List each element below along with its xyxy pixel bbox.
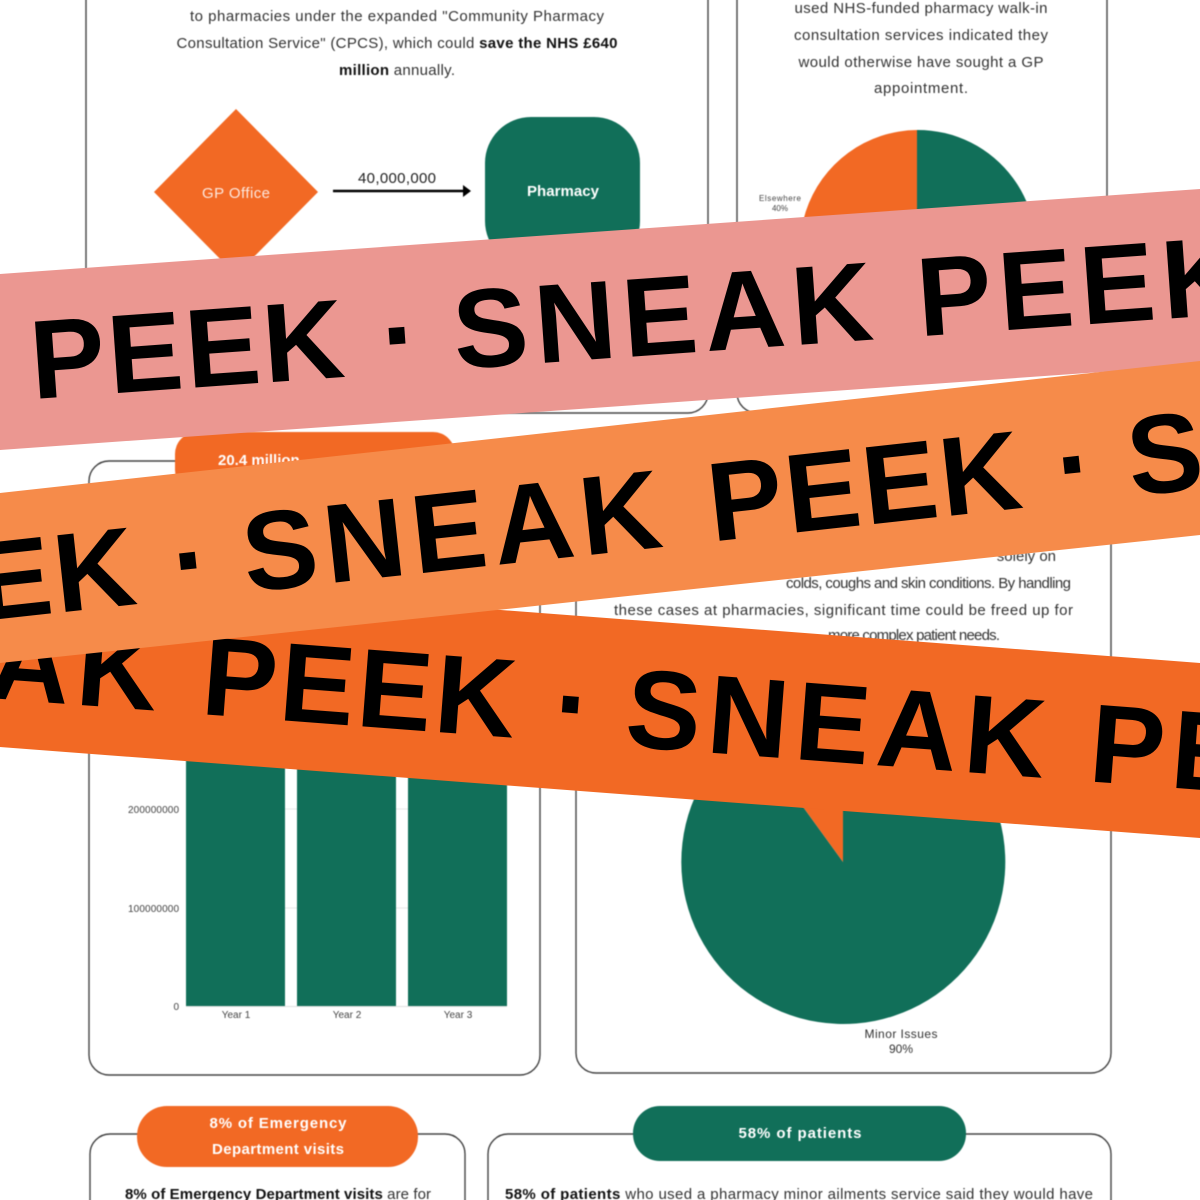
flow: GP office node — [154, 109, 318, 275]
text block: GP time: these cases at pharmacies, significant time could be freed up for — [614, 602, 1073, 619]
pie chart: elsewhere 40%: Elsewhere — [759, 194, 802, 203]
banner: light orange sneak peek: SNEAK — [236, 446, 674, 616]
badge: 20.4 million — [175, 432, 455, 492]
text block: walk-in services: appointment. — [874, 80, 968, 97]
flow: pharmacy node: Pharmacy — [527, 183, 600, 200]
badge: 8% of Emergency Department visits — [137, 1106, 418, 1167]
badge: 58% of patients: 58% of patients — [738, 1125, 862, 1142]
text block: walk-in services — [794, 0, 1048, 97]
text block: CPCS savings: to pharmacies under the expanded "Community Pharmacy — [190, 8, 604, 25]
panel: minor issues card — [576, 461, 1111, 1073]
flow arrow: 40,000,000 — [333, 170, 471, 197]
text block: CPCS savings — [176, 8, 618, 79]
panel: walk-in consultation services — [737, 0, 1107, 413]
badge: 8% of Emergency Department visits: Department visits — [212, 1141, 344, 1158]
banner: light orange sneak peek: PEEK — [701, 407, 1030, 565]
banner: dark orange sneak peek — [0, 572, 1200, 838]
bar chart: three years: 0 — [173, 1002, 179, 1013]
text block: walk-in services: used NHS-funded pharmacy walk-in — [794, 0, 1048, 17]
text block: GP time: more complex patient needs. — [828, 627, 1000, 644]
text block: GP time: solely on — [997, 548, 1056, 565]
badge: 20.4 million: 20.4 million — [218, 452, 300, 469]
banner: pink sneak peek: PEEK — [26, 276, 351, 423]
pie chart: minor issues 90%: 90% — [889, 1042, 913, 1056]
panel: 58% of patients — [488, 1106, 1111, 1200]
pie chart: minor issues 90%: Minor Issues — [864, 1027, 938, 1041]
flow: GP office node: GP Office — [202, 185, 270, 202]
text block: CPCS savings: Consultation Service" (CPCS), which could save the NHS £640 — [176, 35, 618, 52]
badge: 8% of Emergency Department visits: 8% of Emergency — [210, 1115, 347, 1132]
bar chart: three years: 200000000 — [128, 805, 179, 816]
text block: GP time: colds, coughs and skin conditions. By handling — [786, 575, 1071, 592]
badge: 58% of patients — [633, 1106, 966, 1161]
bar chart: three years — [128, 720, 507, 1021]
text block: CPCS savings: million annually. — [339, 62, 455, 79]
banner: light orange sneak peek: · — [165, 495, 223, 624]
bar chart: three years: Year 2 — [333, 1010, 362, 1021]
panel: bar chart card — [89, 432, 540, 1075]
pie chart: minor issues 90% — [681, 700, 1005, 1056]
panel: emergency department visits — [90, 1106, 465, 1200]
flow arrow: 40,000,000: 40,000,000 — [358, 170, 436, 187]
banner: pink sneak peek: · — [377, 270, 430, 398]
panel: community pharmacy consultation service — [86, 0, 708, 413]
bar chart: three years: Year 1 — [222, 1010, 251, 1021]
banner: light orange sneak peek — [0, 349, 1200, 663]
banner: dark orange sneak peek: SNEAK — [622, 645, 1057, 802]
bar chart: three years: 100000000 — [128, 904, 179, 915]
pie chart: elsewhere 40%: 40% — [772, 204, 788, 213]
banner: dark orange sneak peek: PEEK — [198, 613, 524, 762]
flow: pharmacy node — [485, 117, 640, 267]
banner: pink sneak peek: SNEAK — [449, 238, 884, 393]
text block: walk-in services: consultation services indicated they — [794, 27, 1048, 44]
banner: dark orange sneak peek: · — [550, 640, 604, 768]
bar chart: three years: Year 3 — [444, 1010, 473, 1021]
banner: pink sneak peek — [0, 189, 1200, 450]
banner: light orange sneak peek: · — [1049, 399, 1107, 528]
text block: GP time — [614, 548, 1073, 644]
pie chart: elsewhere 40% — [759, 130, 1036, 366]
text block: walk-in services: would otherwise have sought a GP — [798, 54, 1044, 71]
